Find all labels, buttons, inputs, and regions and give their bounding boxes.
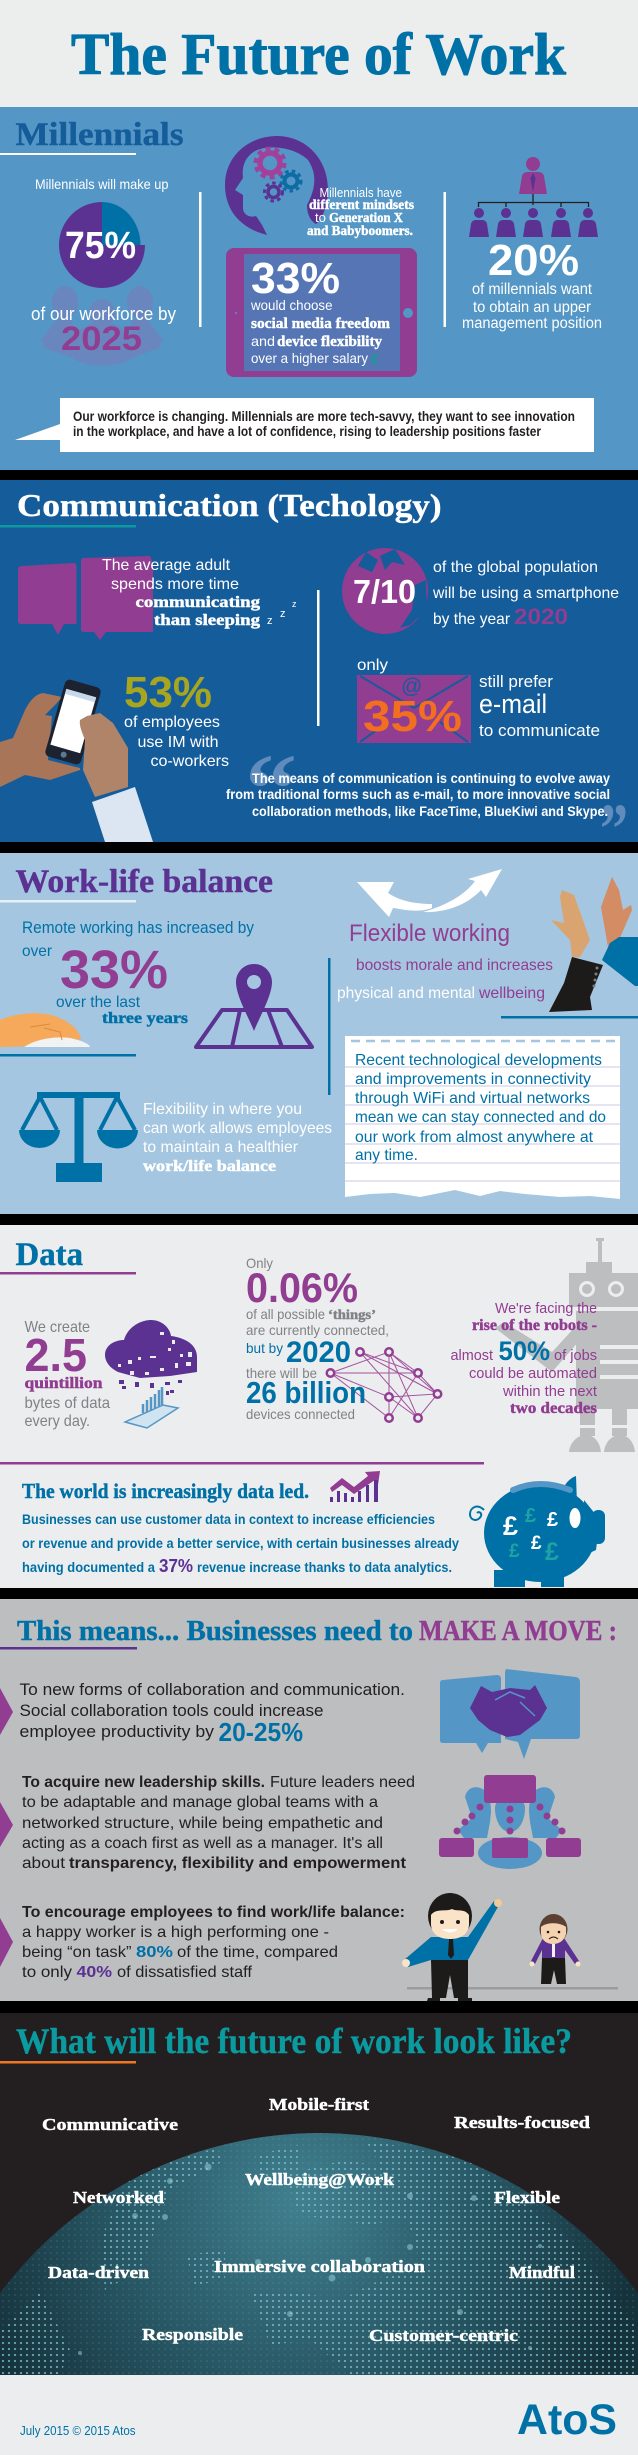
item: work/life balance: To encourage employees to find work/life balance: (22, 1904, 405, 1921)
stat: 20%: management position (462, 315, 602, 332)
keywords: Wellbeing@Work (245, 2170, 395, 2189)
remote working stat (22, 919, 255, 1027)
stat: 20%: to obtain an upper (473, 299, 591, 316)
heading: make a move (17, 1615, 617, 1647)
item: work/life balance: 80% (136, 1944, 173, 1961)
stat: 0.06% things: there will be (246, 1365, 317, 1381)
heading: millennials: Millennials (16, 117, 184, 153)
tablet: would choose (250, 297, 333, 313)
icon: piggy bank: £ (531, 1533, 542, 1554)
remote working stat: Remote working has increased by (22, 919, 255, 937)
quote: The means of communication is continuing to evolve away (252, 771, 610, 786)
stat: 2.5 quintillion: every day. (24, 1413, 90, 1430)
remote working stat: over (22, 943, 53, 960)
tablet (226, 248, 417, 377)
icon: globe with 7/10: 7/10 (353, 573, 416, 610)
robots text: 50% (498, 1336, 550, 1366)
flexible working text: Flexible working (349, 920, 510, 947)
note paper (345, 1036, 620, 1199)
icon: growth chart (330, 1471, 380, 1502)
note paper: Recent technological developments (355, 1052, 602, 1069)
stat: 53%: co-workers (150, 753, 229, 770)
mindsets text (307, 185, 415, 239)
icon: networked team (439, 1775, 581, 1869)
item: leadership: Future leaders need (270, 1774, 415, 1791)
icon: org chart (469, 157, 598, 237)
sleeping text: communicating (136, 594, 260, 611)
keywords: Customer-centric (369, 2326, 519, 2345)
intro text: Millennials will make up (35, 176, 169, 192)
heading: work-life balance: Work-life balance (16, 864, 273, 900)
tablet: device flexibility (277, 334, 383, 350)
item: leadership: to be adaptable and manage global teams with a (22, 1794, 378, 1811)
icon: piggy bank (470, 1476, 605, 1587)
icon: robot (495, 1238, 638, 1452)
title: The Future of Work (71, 21, 566, 87)
heading: data: Data (16, 1237, 83, 1273)
mindsets text: to (315, 210, 326, 225)
item: leadership: To acquire new leadership skills. (22, 1774, 265, 1791)
globe (0, 2133, 638, 2375)
stat: 20% (462, 236, 602, 332)
item: collaboration (20, 1681, 405, 1747)
sleeping text: The average adult (102, 557, 231, 574)
icon: speech bubbles (18, 556, 153, 640)
icon: globe with 7/10 (342, 548, 428, 634)
stat: 0.06% things: devices connected (246, 1406, 355, 1422)
item: leadership (22, 1774, 415, 1872)
stat: 0.06% things: are currently connected, (246, 1322, 389, 1338)
stat: 53% (124, 668, 229, 770)
panel: work-life balance (0, 853, 638, 1214)
tablet: social media freedom (251, 316, 391, 332)
smartphone text: 2020 (514, 604, 568, 629)
item: collaboration: 20-25% (218, 1717, 303, 1747)
workforce text: of our workforce by (31, 304, 176, 324)
data paragraph: 37% (159, 1556, 193, 1576)
quote: ” (600, 789, 628, 869)
stat: 20%: 20% (488, 236, 579, 285)
icon: data cloud (105, 1320, 197, 1428)
mindsets text: Millennials have (320, 185, 402, 200)
keywords: Mindful (509, 2263, 575, 2282)
note paper: through WiFi and virtual networks (355, 1090, 590, 1107)
callout: Our workforce is changing. Millennials are more tech-savvy, they want to see innovation (73, 409, 575, 424)
pie chart 75%: 75% (65, 225, 136, 267)
smartphone text: of the global population (433, 559, 598, 576)
tablet: 33% (251, 254, 340, 303)
date and copyright: July 2015 © 2015 Atos (20, 2423, 136, 2438)
smartphone text: will be using a smartphone (432, 585, 619, 602)
data paragraph: or revenue and provide a better service, with certain businesses already (22, 1536, 459, 1551)
smartphone text (432, 559, 619, 629)
item: collaboration: To new forms of collaboration and communication. (20, 1681, 405, 1699)
flexibility text (143, 1101, 332, 1175)
robots text (450, 1300, 598, 1417)
panel: data (0, 1225, 638, 1588)
stat: 0.06% things: 2020 (286, 1336, 351, 1369)
sleeping text: than sleeping (154, 612, 260, 629)
stat: 53%: of employees (124, 714, 220, 731)
stat: 0.06% things: 0.06% (246, 1264, 358, 1311)
email text: e-mail (479, 689, 547, 719)
icon: piggy bank: £ (503, 1511, 518, 1541)
stat: 53%: use IM with (138, 734, 218, 751)
panel: communication (0, 480, 638, 869)
keywords: Results-focused (454, 2113, 591, 2132)
item: collaboration: employee productivity by (20, 1723, 215, 1741)
stat: 2.5 quintillion: We create (24, 1319, 90, 1336)
stat: 0.06% things: Only (246, 1255, 273, 1271)
item: work/life balance: being “on task” (22, 1944, 132, 1961)
quote: collaboration methods, like FaceTime, BlueKiwi and Skype. (252, 804, 608, 819)
panel: make a move (0, 1599, 638, 2001)
item: work/life balance: of the time, compared (177, 1944, 338, 1961)
note paper: and improvements in connectivity (355, 1071, 591, 1088)
item: work/life balance: 40% (76, 1964, 112, 1981)
callout: in the workplace, and have a lot of confidence, rising to leadership positions faster (73, 424, 542, 439)
stat: 2.5 quintillion: 2.5 (24, 1329, 87, 1381)
flexibility text: work/life balance (143, 1158, 276, 1175)
stat: 2.5 quintillion: quintillion (24, 1375, 103, 1392)
heading: make a move: This means... Businesses need to (17, 1615, 413, 1647)
keywords (42, 2095, 591, 2345)
sleeping text: spends more time (111, 576, 239, 593)
tablet: and (251, 333, 275, 349)
flexibility text: can work allows employees (143, 1120, 332, 1137)
flexible working text: boosts morale and increases (356, 957, 553, 974)
icon: piggy bank: £ (547, 1509, 558, 1531)
item: leadership: networked structure, while being empathetic and (22, 1815, 383, 1832)
icon: hand on mouse (0, 1013, 90, 1047)
robots text: within the next (502, 1383, 598, 1400)
icon: happy worker (402, 1893, 502, 2001)
icon: piggy bank: £ (509, 1541, 520, 1562)
icon: envelope 35%: 35% (363, 692, 462, 741)
icon: flexible arrows (357, 869, 502, 917)
sleeping text: z (292, 599, 297, 609)
email text: still prefer (479, 673, 554, 691)
icon: head with gears (225, 136, 328, 235)
mindsets text: and Babyboomers. (307, 224, 413, 239)
icon: envelope 35%: @ (401, 675, 422, 698)
pie chart 75% (59, 202, 145, 288)
email text: to communicate (479, 722, 600, 740)
sleeping text: z (280, 608, 286, 620)
callout (15, 398, 594, 452)
icon: map pin (196, 964, 312, 1047)
data paragraph: having documented a (22, 1560, 155, 1575)
keywords: Immersive collaboration (214, 2257, 426, 2276)
tablet: over a higher salary (251, 350, 368, 366)
icon: hands with phone (0, 678, 153, 842)
stat: 0.06% things: ‘things’ (328, 1308, 376, 1323)
stat: 26 billion: 26 billion (246, 1375, 366, 1410)
smartphone text: by the year (433, 611, 511, 628)
icon: piggy bank: £ (525, 1505, 536, 1527)
item: leadership: transparency, flexibility and empowerment (69, 1855, 406, 1872)
data paragraph: revenue increase thanks to data analytics. (197, 1560, 452, 1575)
keywords: Mobile-first (269, 2095, 369, 2114)
quote: from traditional forms such as e-mail, to more innovative social (226, 787, 610, 802)
flexible working text: physical and mental (337, 985, 475, 1002)
icon: handshake bubbles (440, 1669, 580, 1759)
robots text: of jobs (554, 1347, 597, 1364)
icon: unhappy worker (530, 1914, 580, 1984)
icon: envelope 35% (357, 675, 471, 743)
note paper: mean we can stay connected and do (355, 1109, 606, 1126)
flexibility text: to maintain a healthier (143, 1139, 299, 1156)
flexibility text: Flexibility in where you (143, 1101, 302, 1118)
only: only (357, 657, 388, 674)
heading: future of work: What will the future of work look like? (16, 2021, 572, 2061)
robots text: almost (450, 1347, 494, 1364)
stat: 2.5 quintillion: bytes of data (24, 1395, 110, 1412)
panel: millennials (0, 107, 638, 470)
remote working stat: 33% (60, 940, 168, 1000)
robots text: could be automated (469, 1365, 597, 1382)
quote: “ (245, 733, 297, 844)
keywords: Networked (73, 2188, 165, 2207)
footer (0, 2375, 638, 2455)
note paper: our work from almost anywhere at (355, 1129, 594, 1146)
data led heading: The world is increasingly data led. (22, 1479, 309, 1503)
data paragraph: Businesses can use customer data in context to increase efficiencies (22, 1512, 435, 1527)
icon: network (326, 1347, 442, 1423)
keywords: Responsible (142, 2325, 244, 2344)
remote working stat: three years (102, 1010, 188, 1027)
robots text: two decades (510, 1400, 597, 1417)
data paragraph (22, 1512, 459, 1576)
stat: 2.5 quintillion (24, 1319, 110, 1430)
logo: Atos: AtoS (517, 2396, 617, 2444)
item: collaboration: Social collaboration tools could increase (20, 1702, 324, 1720)
item: work/life balance (22, 1904, 405, 1981)
item: work/life balance: of dissatisfied staff (117, 1964, 253, 1981)
robots text: rise of the robots - (472, 1317, 597, 1334)
stat: 0.06% things: but by (246, 1340, 283, 1356)
icon: high five (549, 877, 638, 1012)
header (0, 0, 638, 107)
item: work/life balance: to only (22, 1964, 72, 1981)
note paper: any time. (355, 1147, 418, 1164)
sleeping text (102, 557, 297, 629)
remote working stat: over the last (56, 994, 141, 1011)
heading: communication: Communication (Techology) (17, 487, 441, 523)
stat: 0.06% things (246, 1255, 389, 1422)
icon: scales (19, 1092, 138, 1182)
item: work/life balance: a happy worker is a high performing one - (22, 1924, 329, 1941)
icon: people silhouette (41, 286, 163, 366)
tablet: € (371, 351, 380, 368)
icon: piggy bank: £ (545, 1538, 559, 1566)
panel: future of work (0, 2013, 638, 2375)
keywords: Flexible (494, 2188, 561, 2207)
mindsets text: Generation X (329, 211, 403, 226)
arrow markers (0, 1688, 13, 1967)
stat: 53%: 53% (124, 668, 212, 717)
year 2025: 2025 (61, 320, 142, 358)
item: leadership: about (22, 1855, 66, 1872)
robots text: We're facing the (495, 1300, 597, 1317)
stat: 20%: of millennials want (472, 281, 593, 298)
flexible working text: wellbeing (478, 985, 545, 1002)
mindsets text: different mindsets (309, 198, 415, 213)
stat: 0.06% things: of all possible (246, 1306, 325, 1322)
flexible working text (337, 920, 553, 1002)
keywords: Data-driven (48, 2263, 150, 2282)
keywords: Communicative (42, 2115, 179, 2134)
email text (479, 673, 600, 740)
sleeping text: z (267, 615, 272, 627)
item: leadership: acting as a coach first as well as a manager. It's all (22, 1835, 383, 1852)
quote (226, 733, 628, 869)
